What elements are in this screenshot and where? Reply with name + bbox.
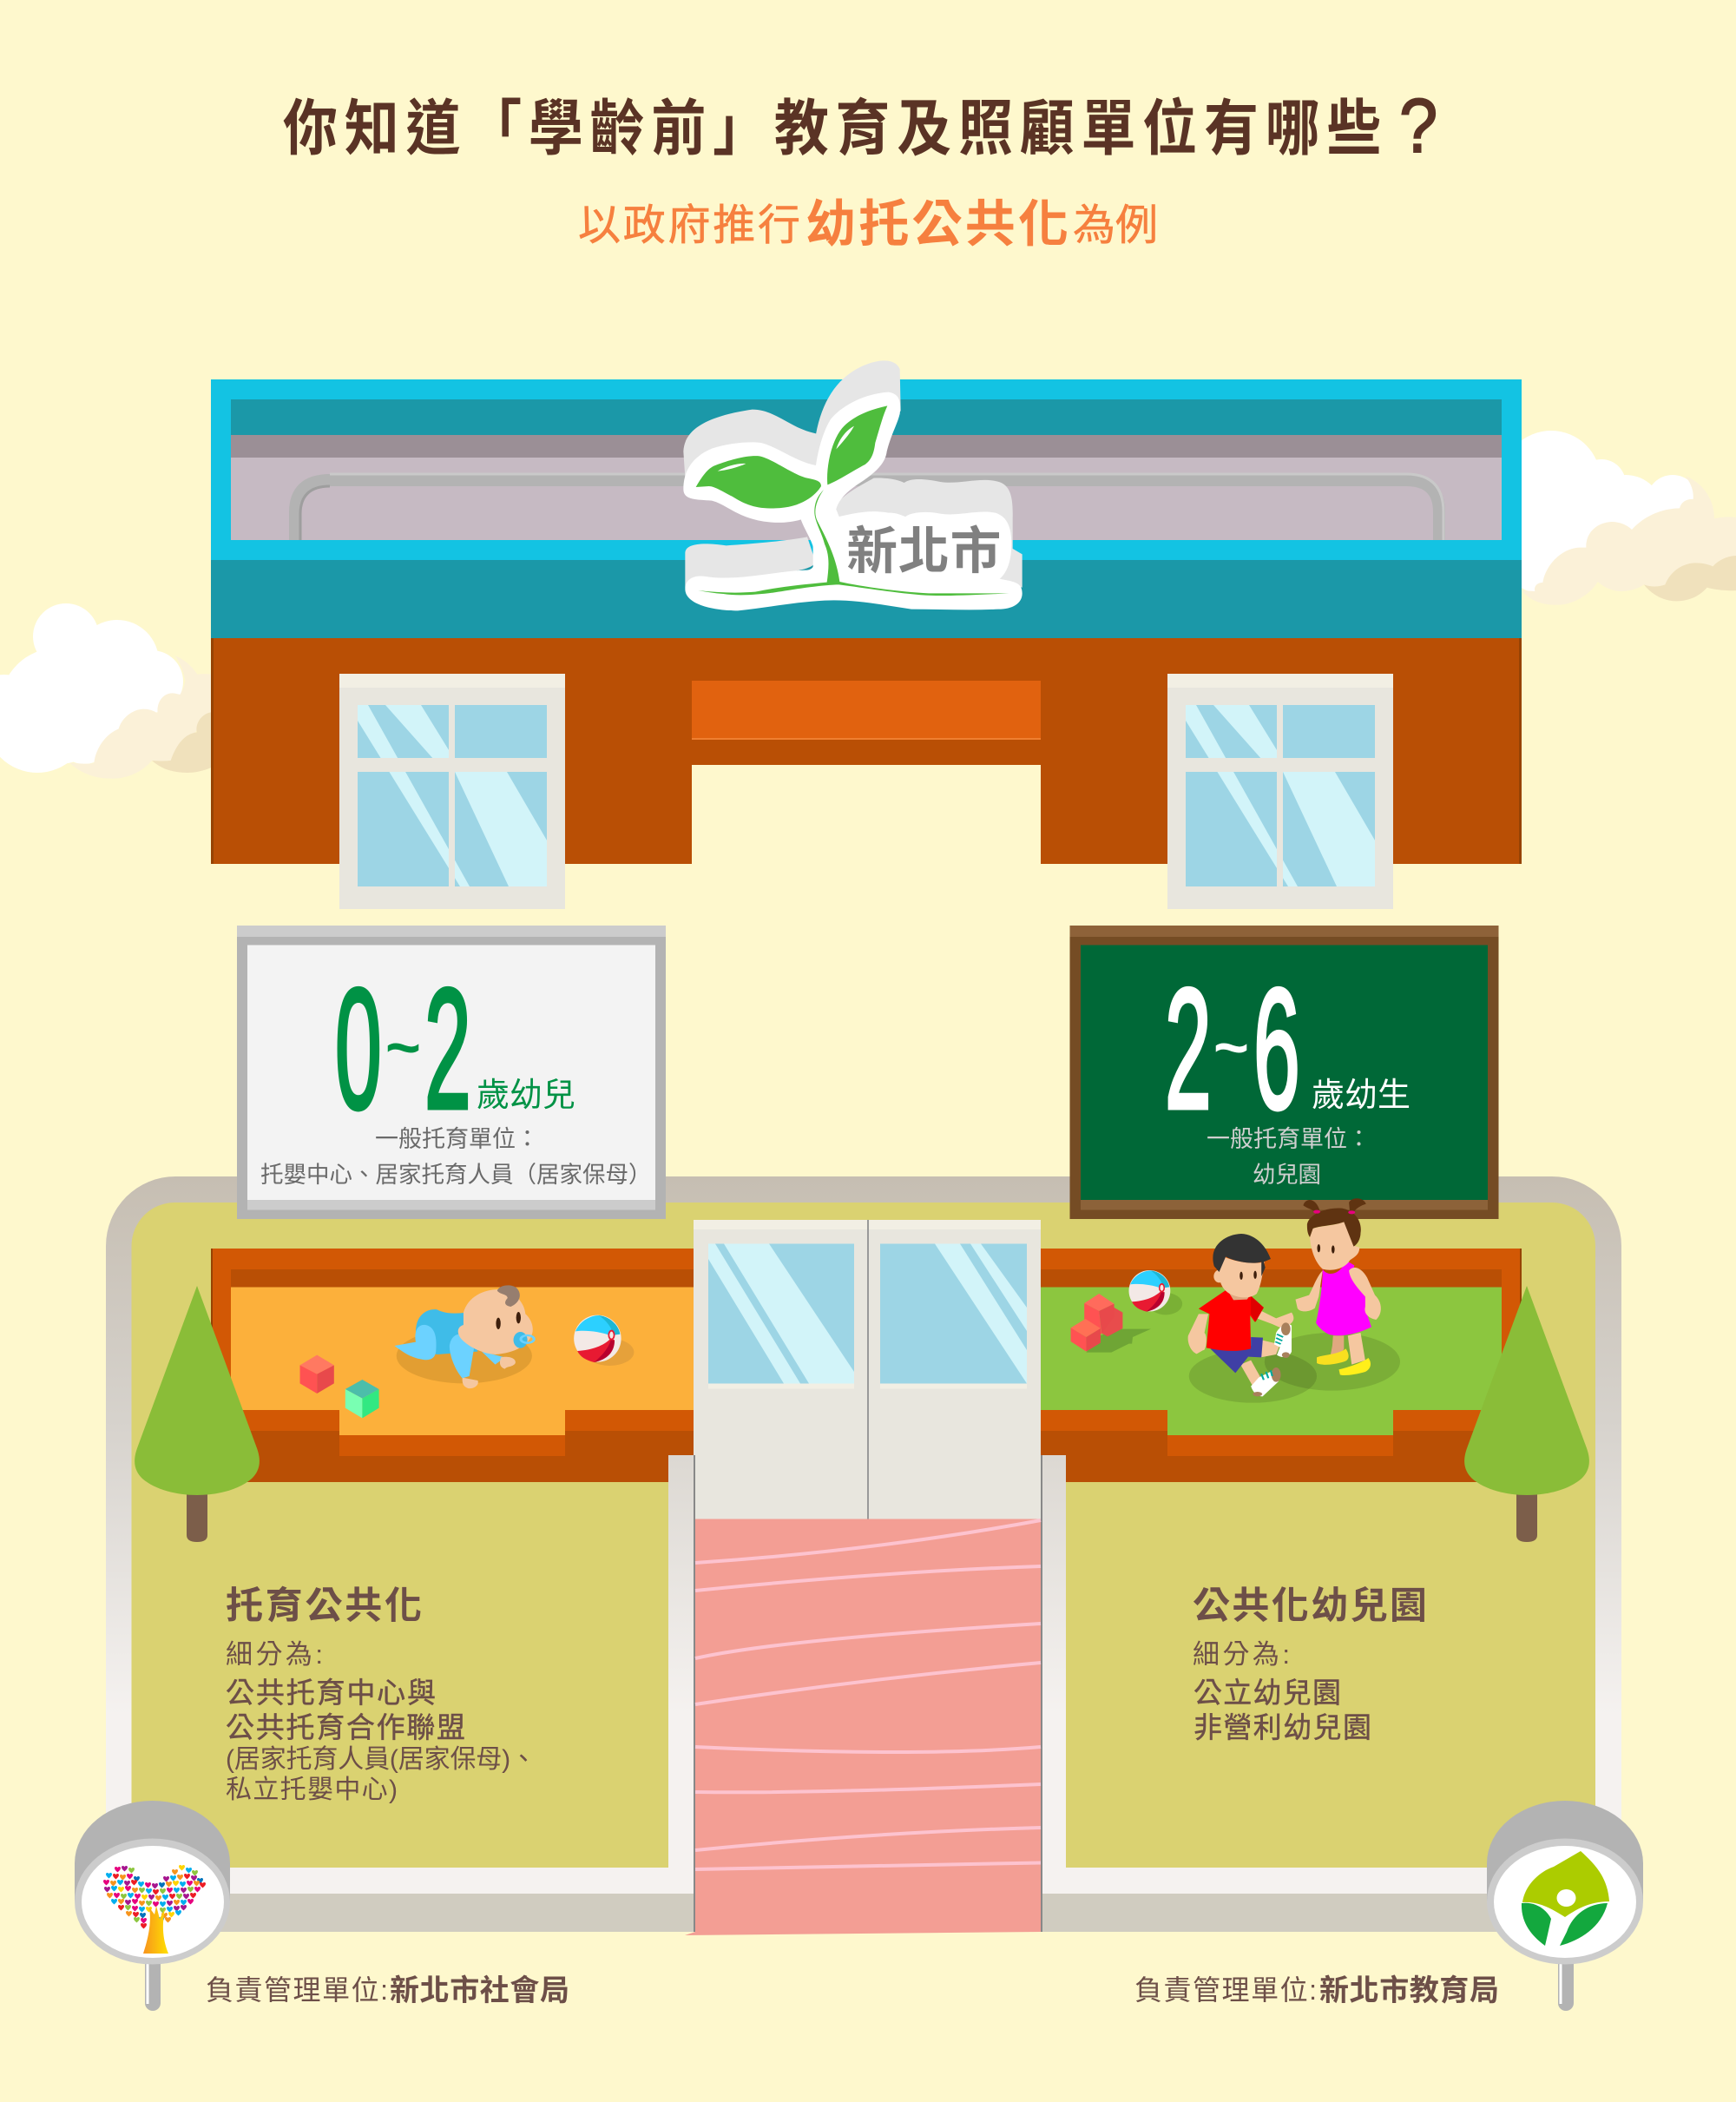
roof pipe — [295, 474, 1443, 540]
age number: 歲幼生 — [1312, 1077, 1410, 1114]
icon: children playing scene — [1071, 1198, 1400, 1403]
subtitle: 為例 — [1073, 202, 1158, 249]
text block: childcare public — [226, 1585, 536, 1804]
age number — [335, 953, 575, 1144]
baby — [394, 1285, 534, 1388]
pin icon: social affairs bureau — [75, 1801, 230, 2011]
subtitle: 以政府推行 — [578, 202, 800, 249]
age number: 2 — [424, 953, 471, 1144]
text block: public kindergarten: 公立幼兒園 — [1194, 1677, 1341, 1709]
board text: 幼兒園 — [1253, 1162, 1321, 1188]
entrance opening and awning — [692, 681, 1041, 864]
text block: childcare public: 公共托育中心與 — [226, 1677, 436, 1709]
window: right — [1167, 674, 1393, 909]
board text: 一般托育單位： — [375, 1126, 539, 1152]
age number — [1165, 953, 1410, 1144]
front door — [694, 1220, 1041, 1519]
building upper facade — [211, 379, 1522, 864]
board text: 一般托育單位： — [1207, 1126, 1371, 1152]
text block: public kindergarten: 非營利幼兒園 — [1194, 1711, 1371, 1743]
beach ball — [574, 1315, 634, 1366]
tree: left — [135, 1286, 260, 1542]
board text: 托嬰中心、居家托育人員（居家保母） — [260, 1162, 651, 1188]
cloud: right — [1522, 431, 1736, 604]
text block: childcare public: 公共托育合作聯盟 — [226, 1711, 465, 1743]
tree: right — [1464, 1286, 1589, 1542]
pin icon: education bureau — [1487, 1801, 1643, 2011]
text block: childcare public: 細分為: — [226, 1639, 323, 1670]
ground shadows — [1189, 1333, 1400, 1403]
age number: 歲幼兒 — [477, 1077, 575, 1114]
sign board: 0-2 — [237, 926, 666, 1219]
text block: public kindergarten: 細分為: — [1193, 1639, 1290, 1670]
age number: 0 — [335, 953, 382, 1144]
footer: left manager — [206, 1974, 569, 2007]
icon: crawling baby scene — [300, 1285, 634, 1418]
walkway curbs — [668, 1455, 1066, 1932]
education leaf logo — [1522, 1851, 1609, 1946]
logo: New Taipei sprout — [683, 360, 1023, 610]
boy — [1188, 1234, 1293, 1396]
toy blocks — [300, 1355, 379, 1418]
pink carpet — [685, 1519, 1041, 1935]
age number: 6 — [1253, 953, 1300, 1144]
room: left orange — [211, 1249, 694, 1482]
age number: 2 — [1165, 953, 1212, 1144]
heart tree — [103, 1865, 206, 1954]
age number: ~ — [1213, 1013, 1249, 1081]
subtitle — [578, 196, 1158, 253]
room: right green — [1041, 1249, 1522, 1482]
footer: left manager: 負責管理單位: — [206, 1974, 388, 2006]
title: ? — [1399, 82, 1437, 168]
footer: right manager: 負責管理單位: — [1134, 1974, 1317, 2006]
sign board: 2-6 — [1069, 926, 1498, 1219]
cloud: left — [0, 603, 213, 779]
age number: ~ — [385, 1013, 421, 1081]
board text — [260, 1126, 651, 1188]
text block: public kindergarten: 公共化幼兒園 — [1193, 1585, 1427, 1627]
title: 你知道「學齡前」教育及照顧單位有哪些 — [283, 96, 1388, 163]
footer: left manager: 新北市社會局 — [390, 1974, 569, 2007]
logo: New Taipei sprout: 新北市 — [846, 524, 1001, 580]
board text — [1207, 1126, 1371, 1188]
footer: right manager — [1134, 1974, 1499, 2007]
footer: right manager: 新北市教育局 — [1319, 1974, 1499, 2007]
text block: childcare public: (居家托育人員(居家保母)、 — [226, 1745, 536, 1774]
text block: childcare public: 私立托嬰中心) — [226, 1776, 398, 1804]
toy blocks — [1071, 1294, 1151, 1353]
perimeter wall and yard — [106, 1176, 1621, 1932]
window: left — [339, 674, 565, 909]
girl — [1296, 1198, 1381, 1375]
text block: public kindergarten — [1193, 1585, 1427, 1743]
beach ball — [1129, 1270, 1182, 1315]
text block: childcare public: 托育公共化 — [226, 1585, 422, 1627]
subtitle: 幼托公共化 — [806, 196, 1069, 253]
